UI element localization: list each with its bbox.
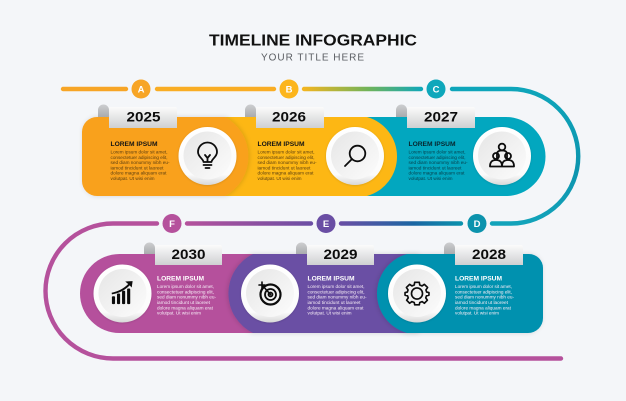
text block 2029: Lorem ipsum dolor sit amet, [308,284,364,289]
text block 2028: Lorem ipsum dolor sit amet, [455,284,512,289]
text block 2025: iamod tincidunt ut laoreet [110,165,164,170]
text block 2029: LOREM IPSUM [308,276,354,283]
text block 2028 [455,276,515,316]
text block 2025: dolore magna aliquam erat [110,171,167,176]
tag 2025: 2025 [126,108,161,124]
panel: 2028 teal [377,254,543,333]
icon: team [473,127,531,185]
panel: 2030 pink [80,254,300,333]
tag 2030 [144,243,222,265]
title: TIMELINE INFOGRAPHIC [209,32,417,50]
text block 2028: consectetuer adipiscing elit, [455,289,512,294]
text block 2028: dolore magna aliquam erat [455,305,512,310]
text block 2027: LOREM IPSUM [408,141,456,148]
text block 2025: Lorem ipsum dolor sit amet, [110,150,168,154]
text block 2026: iamod tincidunt ut laoreet [258,165,311,170]
panel: 2029 purple [228,254,420,333]
text block 2027: Lorem ipsum dolor sit amet, [408,150,466,154]
timeline connector path [46,89,578,358]
panel: 2025 orange [82,117,248,196]
text block 2030: sed diam nonummy nibh eu- [157,295,217,300]
icon: gear [388,264,446,322]
marker F: F [169,219,175,230]
text block 2028: LOREM IPSUM [455,276,502,283]
icon: growth chart [94,264,152,322]
tag 2029: 2029 [324,246,358,262]
text block 2026: LOREM IPSUM [258,141,304,148]
text block 2025 [110,141,170,181]
text block 2030: LOREM IPSUM [157,276,204,283]
text block 2029: consectetuer adipiscing elit, [308,289,364,294]
marker E [316,214,336,233]
text block 2027: consectetuer adipiscing elit, [408,155,465,160]
tag 2025 [98,104,177,128]
text block 2030: iamod tincidunt ut laoreet [157,300,211,305]
marker B: B [286,84,293,96]
text block 2028: volutpat. Ut wisi enim [455,311,499,316]
text block 2030: dolore magna aliquam erat [157,305,214,310]
text block 2027: volutpat. Ut wisi enim [408,176,453,181]
text block 2026: sed diam nonummy nibh eu- [258,160,317,165]
bottom band [80,254,543,333]
text block 2030: consectetuer adipiscing elit, [157,289,214,294]
text block 2026 [258,141,317,181]
text block 2025: volutpat. Ut wisi enim [110,176,155,181]
tag 2026 [245,104,324,128]
subtitle: YOUR TITLE HERE [261,52,364,64]
text block 2027: sed diam nonummy nibh eu- [408,160,468,165]
text block 2027: dolore magna aliquam erat [408,171,465,176]
text block 2027: iamod tincidunt ut laoreet [408,165,462,170]
marker A [132,80,150,98]
text block 2026: volutpat. Ut wisi enim [258,176,302,181]
marker A: A [138,84,145,96]
tag 2027: 2027 [424,108,458,124]
text block 2029: sed diam nonummy nibh eu- [308,295,367,300]
tag 2029 [296,243,374,265]
text block 2028: sed diam nonummy nibh eu- [455,295,515,300]
text block 2029 [308,276,367,316]
tag 2027 [396,104,475,128]
panel: 2026 yellow [200,117,397,196]
marker C [426,80,446,98]
text block 2025: LOREM IPSUM [110,141,158,148]
tag 2030: 2030 [172,246,206,262]
panel: 2027 teal [300,117,546,196]
text block 2026: dolore magna aliquam erat [258,171,314,176]
text block 2026: Lorem ipsum dolor sit amet, [258,150,314,154]
text block 2026: consectetuer adipiscing elit, [258,155,314,160]
text block 2025: sed diam nonummy nibh eu- [110,160,170,165]
text block 2025: consectetuer adipiscing elit, [110,155,167,160]
text block 2027 [408,141,468,181]
text block 2030: volutpat. Ut wisi enim [157,311,201,316]
text block 2028: iamod tincidunt ut laoreet [455,300,509,305]
top band [82,117,546,196]
marker B [280,80,298,98]
icon: light bulb [178,127,236,185]
marker E: E [323,219,329,230]
text block 2030 [157,276,217,316]
icon: magnifier [326,127,384,185]
marker D [468,214,486,233]
text block 2029: dolore magna aliquam erat [308,305,364,310]
text block 2030: Lorem ipsum dolor sit amet, [157,284,214,289]
tag 2026: 2026 [272,108,306,124]
icon: target [241,264,299,322]
tag 2028: 2028 [472,246,506,262]
marker F [162,214,182,233]
tag 2028 [444,243,523,265]
text block 2029: iamod tincidunt ut laoreet [308,300,361,305]
marker C: C [433,84,440,96]
marker D: D [474,219,481,230]
text block 2029: volutpat. Ut wisi enim [308,311,352,316]
